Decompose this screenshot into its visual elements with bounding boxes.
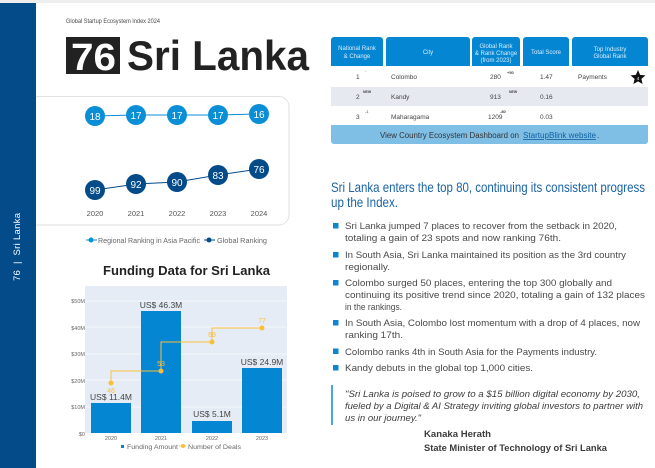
regional ranking series: 17 — [212, 111, 224, 122]
chart legend: Global Ranking — [217, 238, 267, 245]
global ranking series: 76 — [253, 165, 265, 176]
icon: star rank: 4 — [637, 76, 640, 81]
regional ranking series: 16 — [253, 110, 265, 121]
table rows: 913 — [490, 94, 501, 101]
table rows: 2 — [356, 94, 360, 101]
title: Sri Lanka — [127, 32, 310, 79]
bar value labels: US$ 24.9M — [241, 357, 283, 367]
table rows: NEW — [509, 90, 518, 94]
table rows: NEW — [363, 90, 372, 94]
table rows: -1 — [365, 109, 369, 114]
quote — [331, 385, 643, 425]
quote attribution — [424, 429, 608, 454]
table header: City — [423, 50, 433, 56]
y axis labels: $50M — [71, 299, 85, 305]
table rows: - — [365, 68, 367, 73]
dashboard link bar: . — [597, 131, 599, 140]
table rows: +50 — [507, 70, 515, 75]
funding legend — [121, 444, 241, 451]
table header — [331, 37, 648, 66]
quote attribution: Kanaka Herath — [424, 429, 491, 440]
table header: & Rank Change — [475, 51, 518, 57]
table header: (from 2023) — [480, 58, 512, 64]
y axis labels: $10M — [71, 405, 85, 411]
x axis years — [105, 436, 268, 442]
y axis labels — [71, 299, 85, 438]
dashboard link bar: View Country Ecosystem Dashboard on — [380, 131, 519, 140]
table header: Global Rank — [479, 44, 514, 50]
deals line: 69 — [208, 332, 216, 339]
table header: Global Rank — [593, 54, 628, 60]
table rows: 280 — [490, 74, 501, 81]
deals line: 77 — [258, 318, 266, 325]
y axis labels: $0 — [79, 432, 85, 438]
table header: National Rank — [338, 46, 377, 52]
bar value labels — [90, 300, 283, 419]
table rows: 0.03 — [540, 114, 553, 121]
funding legend: Number of Deals — [188, 445, 241, 451]
x axis years: 2020 — [105, 436, 117, 442]
year axis labels: 2024 — [251, 209, 267, 218]
regional ranking series — [85, 104, 269, 126]
table header: Top Industry — [594, 47, 626, 53]
x axis years: 2023 — [256, 436, 268, 442]
bullet list: in the rankings. — [345, 302, 402, 313]
section heading: up the Index. — [331, 194, 398, 210]
year axis labels — [87, 209, 267, 218]
bullet list: Colombo surged 50 places, entering the top 300 globally and — [345, 278, 612, 289]
quote: fueled by a Digital & AI Strategy inviting global investors to partner with — [345, 401, 643, 412]
table rows: 1.47 — [540, 74, 553, 81]
bullet list: regionally. — [345, 262, 390, 273]
global ranking series: 99 — [89, 186, 101, 197]
section heading — [331, 179, 645, 210]
global ranking series: 83 — [212, 171, 224, 182]
header label: Global Startup Ecosystem Index 2024 — [66, 18, 160, 25]
panel: ranking chart — [36, 96, 289, 225]
table rows: Colombo — [391, 74, 417, 81]
chart legend — [86, 238, 267, 245]
bullet list: In South Asia, Sri Lanka maintained its position as the 3rd country — [345, 250, 626, 261]
table rows: 3 — [356, 114, 360, 121]
deals line — [107, 318, 266, 395]
panel: funding bar chart — [71, 286, 287, 442]
bullet list: Sri Lanka jumped 7 places to recover from the setback in 2020, — [345, 221, 617, 232]
table rows: Kandy — [391, 94, 410, 101]
year axis labels: 2023 — [210, 209, 226, 218]
x axis years: 2022 — [206, 436, 218, 442]
regional ranking series: 18 — [89, 112, 101, 123]
sidebar: 76 | Sri Lanka — [12, 212, 23, 281]
table rows: -80 — [500, 109, 507, 114]
table rows: Maharagama — [391, 114, 430, 121]
table rows: 0.16 — [540, 94, 553, 101]
regional ranking series: 17 — [171, 111, 183, 122]
quote: us in our journey." — [345, 413, 422, 424]
panel: city table — [331, 37, 648, 144]
global ranking series: 90 — [171, 178, 183, 189]
table rows: 1209 — [488, 114, 503, 121]
quote attribution: State Minister of Technology of Sri Lanka — [424, 443, 608, 454]
dashboard link bar: StartupBlink website — [523, 131, 597, 140]
bullet list: continuing its positive trend since 2020, totaling a gain of 132 places — [345, 290, 645, 301]
bullet list: ranking 17th. — [345, 330, 403, 341]
year axis labels: 2022 — [169, 209, 185, 218]
table rows: Payments — [578, 74, 608, 81]
bullet list: Colombo ranks 4th in South Asia for the Payments industry. — [345, 347, 597, 358]
dashboard link bar — [331, 125, 648, 144]
sidebar — [0, 3, 36, 468]
global ranking series: 92 — [130, 180, 142, 191]
year axis labels: 2020 — [87, 209, 103, 218]
bullet list: In South Asia, Colombo lost momentum with a drop of 4 places, now — [345, 318, 640, 329]
y axis labels: $30M — [71, 352, 85, 358]
y axis labels: $20M — [71, 379, 85, 385]
funding bars — [91, 311, 282, 433]
table rows: 1 — [356, 74, 360, 81]
title: 76 — [71, 37, 116, 79]
funding heading: Funding Data for Sri Lanka — [103, 263, 271, 278]
bullet list — [333, 221, 645, 374]
icon: star rank — [630, 70, 646, 84]
global ranking series — [85, 159, 269, 200]
table header: & Change — [344, 54, 371, 60]
quote: "Sri Lanka is poised to grow to a $15 billion digital economy by 2030, — [345, 389, 640, 400]
deals line: 53 — [157, 361, 165, 368]
x axis years: 2021 — [155, 436, 167, 442]
table header: Total Score — [531, 50, 562, 56]
bar value labels: US$ 46.3M — [140, 300, 182, 310]
deals line: 46 — [107, 388, 115, 395]
bar value labels: US$ 5.1M — [193, 409, 231, 419]
funding legend: Funding Amount — [127, 445, 178, 451]
bullet list: totaling a gain of 23 spots and now ranking 76th. — [345, 233, 561, 244]
chart legend: Regional Ranking in Asia Pacific — [98, 238, 201, 245]
y axis labels: $40M — [71, 326, 85, 332]
bar value labels: US$ 11.4M — [90, 392, 132, 402]
bullet list: Kandy debuts in the global top 1,000 cities. — [345, 363, 533, 374]
table rows — [356, 68, 608, 121]
year axis labels: 2021 — [128, 209, 144, 218]
regional ranking series: 17 — [130, 111, 142, 122]
